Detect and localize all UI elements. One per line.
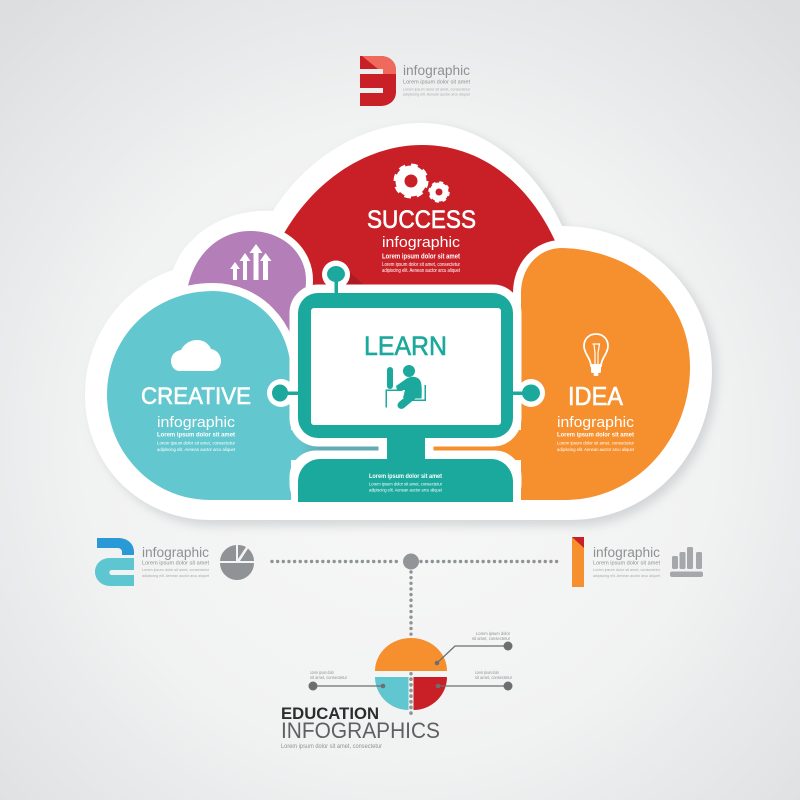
text block: monitor base: [369, 473, 443, 492]
text block: monitor base: adipiscing elit. Aenean auctor arcu aliquet: [369, 488, 443, 492]
callout markers: [308, 642, 512, 690]
callout labels: sit amet, consectetur: [475, 675, 513, 680]
text block: step 3: Lorem ipsum dolor sit amet: [403, 80, 471, 86]
icon: gears: [396, 166, 448, 202]
text block: idea body: infographic: [557, 414, 635, 431]
text block: creative body: [157, 414, 236, 453]
item: step 2: [95, 538, 254, 586]
text block: creative body: infographic: [157, 414, 236, 431]
text block: step 1: [593, 545, 661, 578]
icon: pie chart: [220, 545, 254, 580]
icon: light bulb: [584, 334, 608, 376]
heading: creative: CREATIVE: [141, 383, 251, 410]
text block: step 1: infographic: [593, 545, 660, 560]
icon: bar chart: [670, 547, 703, 577]
connector dots inside chart: [409, 679, 413, 716]
text block: step 1: Lorem ipsum dolor sit amet, consectetur: [593, 568, 661, 572]
text block: idea body: [557, 414, 635, 453]
icon: number 1: [572, 537, 584, 587]
text block: success body: adipiscing elit. Aenean auctor arcu aliquet: [382, 268, 461, 274]
text block: step 3: infographic: [403, 63, 470, 78]
connector: central node: [403, 554, 419, 570]
text block: step 2: Lorem ipsum dolor sit amet, consectetur: [142, 568, 210, 572]
title: [281, 705, 440, 750]
title: EDUCATION: [281, 705, 379, 723]
text block: step 3: adipiscing elit. Aenean auctor arcu aliquet: [403, 92, 471, 96]
title: Lorem ipsum dolor sit amet, consectetur: [281, 744, 382, 750]
icon: cloud: [171, 340, 221, 371]
callout lines: [313, 646, 508, 686]
icon: number 3: [360, 56, 396, 106]
panel: cloud backing: [85, 123, 717, 526]
text block: step 1: Lorem ipsum dolor sit amet: [593, 560, 661, 566]
text block: step 2: infographic: [142, 545, 209, 560]
text block: monitor base: Lorem ipsum dolor sit amet: [369, 473, 442, 480]
icon: number 2: [95, 538, 134, 586]
monitor screen: [311, 308, 501, 425]
panel: monitor: [267, 260, 545, 502]
text block: step 3: [403, 63, 471, 96]
text block: step 2: [142, 545, 210, 578]
text block: creative body: Lorem ipsum dolor sit amet: [157, 432, 236, 438]
heading: learn: LEARN: [364, 331, 447, 361]
panel: idea: [425, 248, 690, 500]
text block: step 2: adipiscing elit. Aenean auctor arcu aliquet: [142, 574, 210, 578]
text block: step 3: Lorem ipsum dolor sit amet, consectetur: [403, 88, 471, 92]
callout labels: Lorem ipsum dolor: [475, 670, 499, 675]
text block: success body: Lorem ipsum dolor sit amet, consectetur: [382, 262, 460, 268]
heading: success: SUCCESS: [367, 206, 476, 234]
text block: idea body: adipiscing elit. Aenean auctor arcu aliquet: [557, 447, 635, 453]
text block: idea body: Lorem ipsum dolor sit amet, consectetur: [557, 440, 634, 446]
icon: person at computer: [386, 365, 426, 409]
callout labels: Lorem ipsum dolor: [310, 670, 334, 675]
text block: creative body: Lorem ipsum dolor sit amet, consectetur: [157, 440, 235, 446]
text block: idea body: Lorem ipsum dolor sit amet: [557, 432, 635, 438]
text block: success body: [382, 234, 461, 274]
item: step 1: [572, 537, 703, 587]
callout labels: sit amet, consectetur: [472, 636, 511, 641]
text block: success body: infographic: [382, 234, 461, 251]
text block: creative body: adipiscing elit. Aenean auctor arcu aliquet: [157, 447, 236, 453]
header: step 3: [360, 56, 471, 106]
monitor body: [272, 266, 540, 502]
text block: step 2: Lorem ipsum dolor sit amet: [142, 560, 210, 566]
title: INFOGRAPHICS: [281, 718, 440, 743]
heading: idea: IDEA: [568, 381, 624, 411]
callout labels: sit amet, consectetur: [310, 675, 348, 680]
panel: growth: [186, 231, 306, 345]
panel: creative: [107, 291, 385, 500]
panel: success: [270, 145, 561, 320]
monitor white halo: [267, 260, 545, 502]
text block: success body: Lorem ipsum dolor sit amet: [382, 254, 461, 260]
text block: monitor base: Lorem ipsum dolor sit amet, consectetur: [369, 482, 442, 486]
text block: step 1: adipiscing elit. Aenean auctor arcu aliquet: [593, 574, 661, 578]
icon: up arrows: [230, 244, 272, 280]
connector: dotted timeline: [272, 562, 557, 716]
callout labels: Lorem ipsum dolor: [476, 631, 511, 636]
callout labels: [310, 631, 513, 680]
chart: segmented circle: [308, 631, 513, 716]
